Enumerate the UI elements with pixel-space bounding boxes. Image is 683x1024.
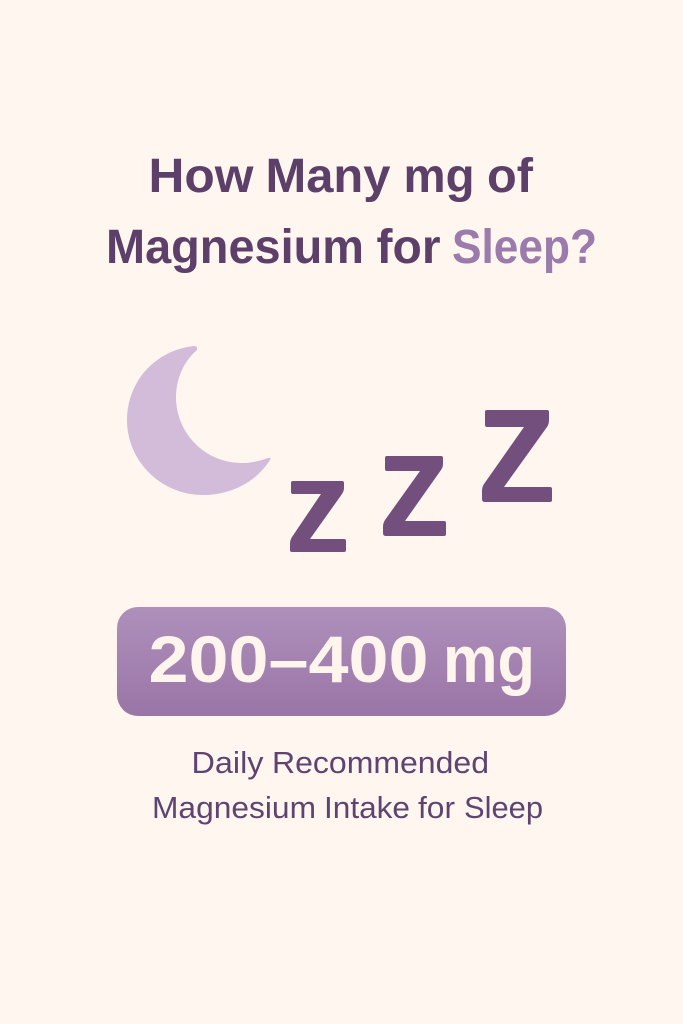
- icon: sleeping Z letters: [290, 410, 552, 552]
- title: How: [148, 150, 254, 203]
- medium z: [383, 456, 446, 536]
- caption: Daily: [192, 746, 264, 780]
- title: Many: [266, 150, 391, 203]
- caption: Sleep: [464, 791, 543, 825]
- title: [106, 150, 597, 274]
- title: mg: [404, 150, 474, 203]
- icon: crescent moon: [127, 346, 271, 495]
- title: Sleep?: [452, 221, 597, 274]
- caption: Recommended: [272, 746, 489, 780]
- dosage value: 200–400: [148, 622, 428, 696]
- dosage badge: [117, 607, 566, 716]
- title: Magnesium: [106, 221, 364, 274]
- caption: [152, 746, 543, 825]
- caption: Intake: [324, 791, 410, 825]
- title: for: [376, 221, 440, 274]
- large z: [482, 410, 552, 502]
- title: of: [487, 150, 534, 203]
- dosage value: [148, 622, 535, 696]
- caption: for: [418, 791, 455, 825]
- small z: [290, 481, 346, 552]
- dosage value: mg: [443, 622, 535, 696]
- caption: Magnesium: [152, 791, 316, 825]
